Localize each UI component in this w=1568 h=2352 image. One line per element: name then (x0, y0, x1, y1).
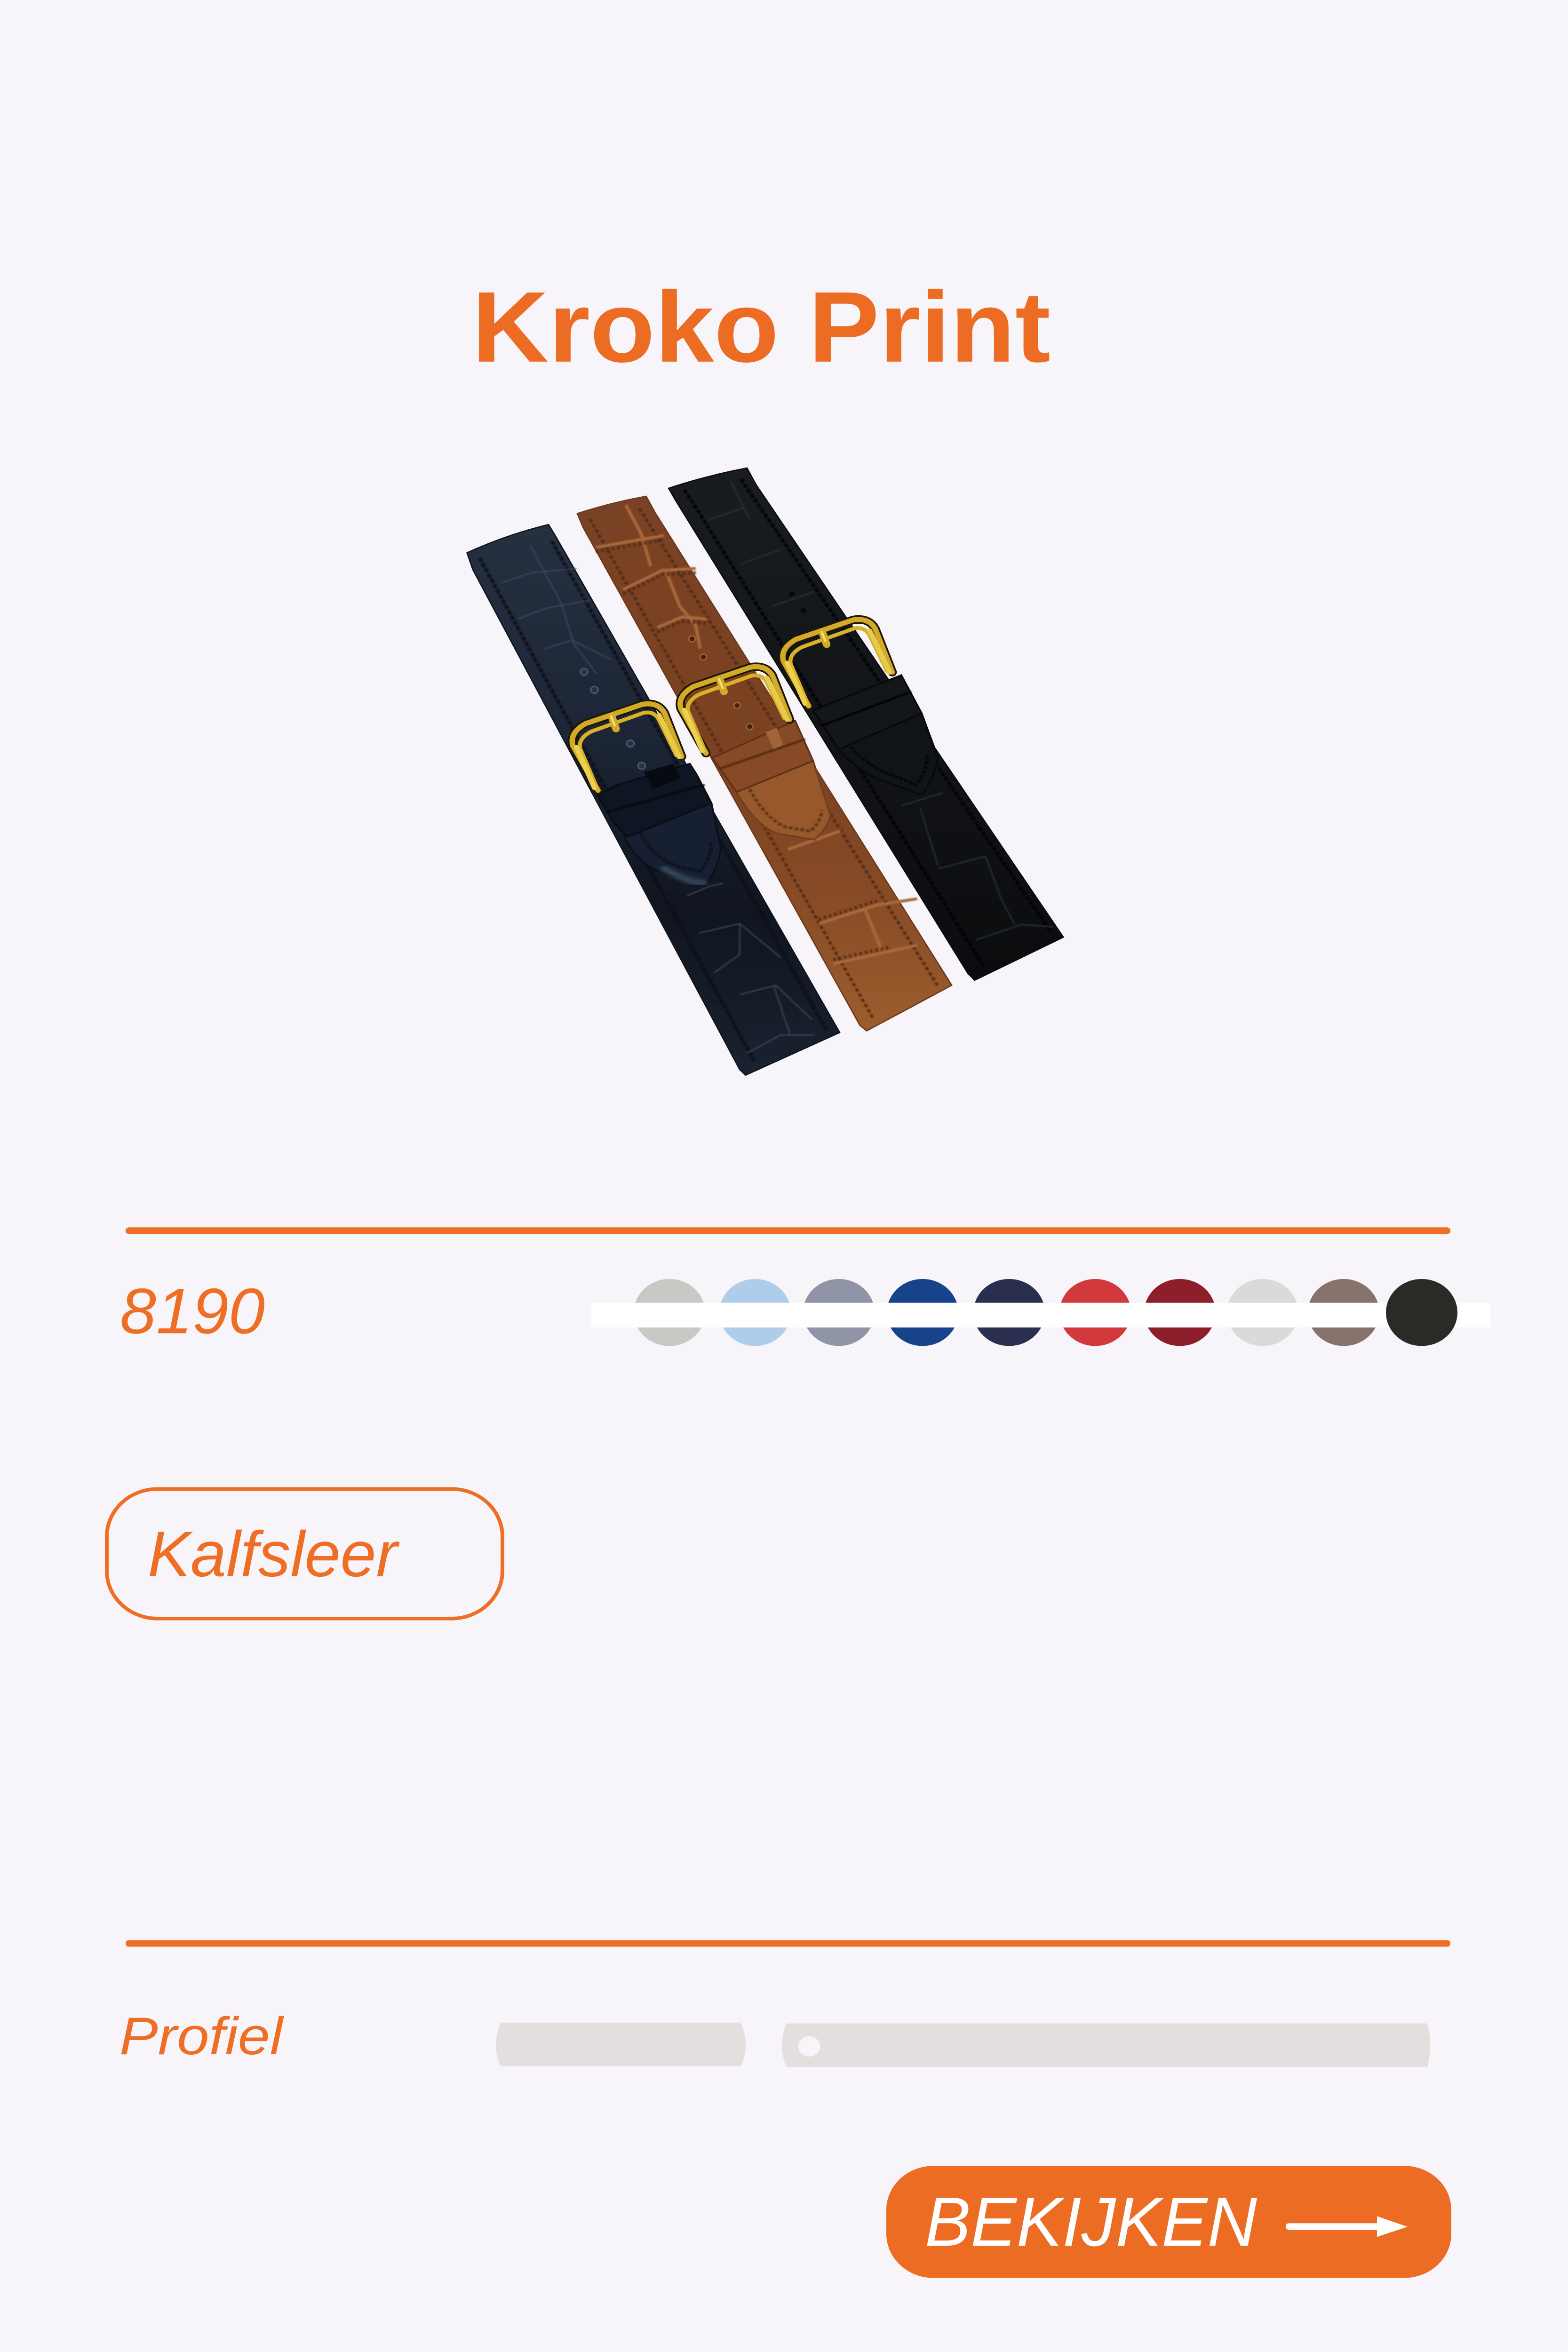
buckle: black strap (783, 620, 892, 706)
item number: 8190 (120, 1275, 265, 1347)
profile label: Profiel (119, 2007, 284, 2066)
material tag: Kalfsleer: Kalfsleer (148, 1518, 400, 1590)
strap tip (624, 803, 721, 884)
buckle: navy strap (572, 704, 682, 790)
top divider (126, 1227, 1450, 1234)
buckle: brown strap (680, 667, 790, 753)
strap keepers (712, 721, 813, 792)
colour swatches (591, 1279, 1490, 1346)
strap tip (737, 761, 830, 840)
white band across swatches (591, 1303, 1490, 1327)
profile shape: short segment (496, 2023, 746, 2066)
swatch: black (1386, 1279, 1457, 1346)
strap: black (669, 468, 1063, 980)
button: BEKIJKEN (886, 2166, 1451, 2278)
product photo: three watch straps (467, 468, 1063, 1075)
bottom divider (126, 1940, 1450, 1947)
strap: navy (467, 524, 840, 1075)
material tag: Kalfsleer (107, 1489, 502, 1619)
strap tip (839, 713, 938, 795)
strap keepers (813, 675, 922, 749)
strap keepers (597, 764, 711, 837)
profile shape: long segment with hole (782, 2024, 1430, 2067)
title: Kroko Print (472, 270, 1051, 383)
strap: brown (577, 496, 952, 1031)
icon: arrow (1286, 2216, 1408, 2237)
button: BEKIJKEN: BEKIJKEN (925, 2183, 1257, 2261)
